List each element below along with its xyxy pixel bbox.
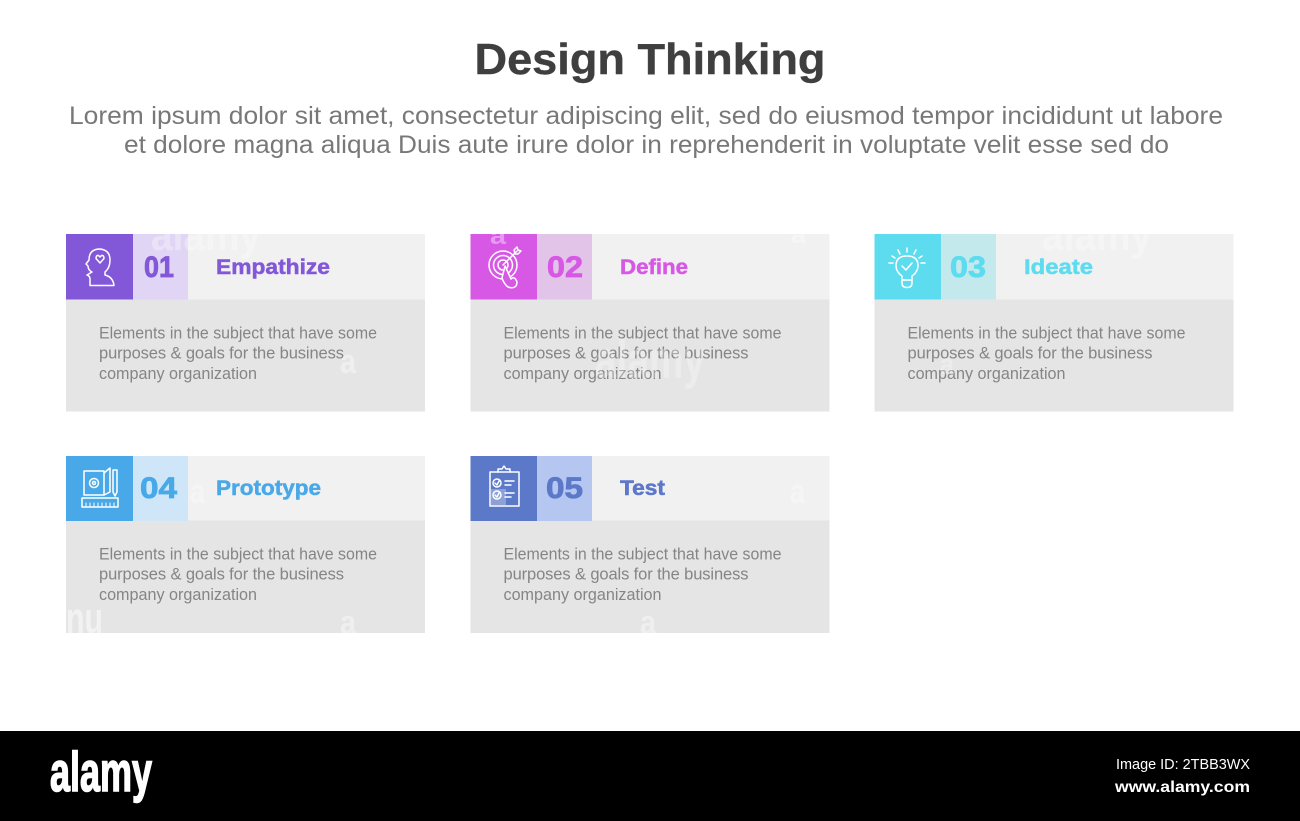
panel: 03 Ideate: [874, 234, 1234, 412]
panel: 02 Define: purposes & goals for the business: [504, 344, 748, 362]
panel: 05 Test: company organization: [504, 586, 662, 604]
panel: 04 Prototype: purposes & goals for the business: [99, 566, 344, 584]
panel: 02 Define: Define: [620, 256, 688, 279]
watermark overlays: alamy: [1042, 211, 1152, 260]
panel: 02 Define: [470, 234, 830, 412]
panel: 03 Ideate: Ideate: [1024, 256, 1093, 279]
watermark overlays: a: [490, 223, 507, 250]
panel: 01 Empathize: [66, 234, 425, 412]
footer bar: [0, 731, 1300, 821]
panel: 05 Test: Elements in the subject that have some: [504, 546, 782, 564]
panel: 04 Prototype: Prototype: [216, 477, 321, 500]
panel: 01 Empathize: purposes & goals for the business: [99, 344, 344, 362]
icon: blueprint, pencil and ruler: [66, 456, 133, 521]
footer logo: alamy: [50, 740, 152, 803]
watermark overlays: alamy: [595, 330, 705, 390]
website: www.alamy.com: [1114, 779, 1250, 796]
panel: 05 Test: 05: [546, 472, 583, 505]
panel: 03 Ideate: purposes & goals for the business: [908, 344, 1152, 362]
icon: clipboard checklist: [470, 456, 537, 521]
icon: target with hand: [470, 234, 537, 300]
icon: light bulb with check: [874, 234, 941, 300]
image id: Image ID: 2TBB3WX: [1116, 756, 1250, 773]
watermark overlays: a: [640, 604, 657, 642]
watermark overlays: [68, 234, 954, 633]
panel: 04 Prototype: company organization: [99, 586, 257, 604]
panel: 03 Ideate: 03: [950, 251, 986, 284]
panel: 01 Empathize: 01: [144, 251, 174, 284]
title: Design Thinking: [474, 35, 826, 84]
watermark overlays: alamy: [151, 211, 261, 260]
panel: 02 Define: company organization: [504, 365, 662, 383]
panel: 05 Test: purposes & goals for the business: [504, 566, 748, 584]
icon: head with heart: [66, 234, 133, 300]
panel: 04 Prototype: Elements in the subject that have some: [99, 546, 377, 564]
panel: 05 Test: Test: [620, 477, 665, 500]
watermark overlays: a: [340, 604, 357, 642]
watermark overlays: a: [791, 222, 807, 249]
panel: 02 Define: 02: [547, 251, 583, 284]
panel: 03 Ideate: Elements in the subject that have some: [908, 324, 1186, 342]
watermark overlays: a: [940, 348, 954, 381]
watermark overlays: nu: [66, 594, 103, 643]
panel: 02 Define: Elements in the subject that have some: [504, 324, 782, 342]
subtitle text block: [69, 102, 1223, 159]
subtitle text block: et dolore magna aliqua Duis aute irure dolor in reprehenderit in voluptate velit esse sed do: [124, 131, 1169, 159]
panel: 05 Test: [470, 456, 830, 633]
panel: 04 Prototype: 04: [140, 472, 177, 505]
watermark overlays: a: [790, 473, 806, 511]
panel: 04 Prototype: [66, 456, 425, 633]
subtitle text block: Lorem ipsum dolor sit amet, consectetur adipiscing elit, sed do eiusmod tempor incididunt ut labore: [69, 102, 1223, 130]
watermark overlays: a: [340, 343, 357, 381]
panel: 01 Empathize: company organization: [99, 365, 257, 383]
watermark overlays: a: [190, 473, 206, 511]
panel: 03 Ideate: company organization: [908, 365, 1066, 383]
panel: 01 Empathize: Empathize: [216, 256, 330, 279]
panel: 01 Empathize: Elements in the subject that have some: [99, 324, 377, 342]
